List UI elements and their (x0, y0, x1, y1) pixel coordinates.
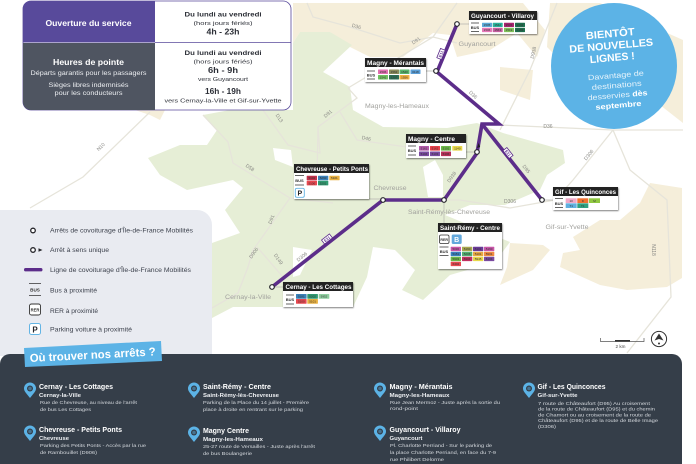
north arrow (651, 331, 667, 347)
panel: legend: Parking voiture à proximité (50, 328, 133, 334)
stop card: Guyancourt - Villaroy: BUS (471, 25, 480, 30)
stop card: Chevreuse - Petits Ponts: P (297, 190, 302, 197)
stop card: Guyancourt - Villaroy: Guyancourt - Villaroy (471, 13, 534, 20)
panel: service hours: vers Cernay-la-Ville et Gif-sur-Yvette (164, 98, 282, 104)
map background: D13 (274, 113, 284, 124)
panel: legend: RER à proximité (50, 309, 99, 315)
stop card: Magny - Centre: 5101 (443, 147, 450, 151)
stop card: Saint-Rémy - Centre: 5030 (452, 247, 459, 251)
stop card: Guyancourt - Villaroy: 1519 (506, 28, 513, 32)
stop card: Magny - Centre: 5106 (443, 152, 450, 156)
stop card: Chevreuse - Petits Ponts: BUS (295, 178, 304, 183)
map background: D91 (411, 36, 422, 46)
stop info: Magny Centre: Magny Centre (203, 428, 249, 435)
callout: new lines: destinations (591, 79, 642, 92)
stop card: Guyancourt - Villaroy: 9503 (506, 23, 513, 27)
stop card: Guyancourt - Villaroy: 0183 (517, 28, 524, 32)
stop card: Magny - Centre: 5104 (421, 152, 428, 156)
stop info: Guyancourt - Villaroy: Pl. Charlotte Perriand - Sur le parking de (390, 443, 492, 449)
scale bar: 2 km (616, 344, 626, 349)
panel: service hours: Sièges libres indemnisés (48, 82, 128, 89)
stop info: Chevreuse - Petits Ponts: Chevreuse - Petits Ponts (39, 427, 122, 434)
map background: D306 (296, 251, 309, 263)
stop info: Gif - Les Quinconces: de la route de Châteaufort (D95) et du chemin (538, 406, 655, 412)
stop card: Saint-Rémy - Centre (438, 223, 502, 269)
stop card: Cernay - Les Cottages: 5100 (298, 300, 305, 304)
stop info: Guyancourt - Villaroy (374, 426, 496, 463)
map background: D91 (323, 109, 334, 119)
panel: legend: RER (31, 308, 39, 312)
map background: D36 (351, 23, 362, 31)
stop card: Cernay - Les Cottages: 5952 (321, 295, 328, 299)
stop card: Gif - Les Quinconces: Gif - Les Quinconces (555, 189, 616, 196)
stop info: Cernay - Les Cottages: Cernay-la-Ville (39, 393, 82, 399)
stop info: Gif - Les Quinconces: (D306) (538, 424, 556, 430)
stop card: Magny - Centre (406, 134, 466, 158)
map background: D36 (543, 124, 553, 130)
stop info: Gif - Les Quinconces: de Chamort ou au croisement de la route de (538, 412, 651, 418)
stop card: Magny - Mérantais: Magny - Mérantais (367, 60, 424, 67)
stop info: Magny - Mérantais (374, 382, 500, 412)
stop info: Saint-Rémy - Centre: Saint-Rémy-lès-Chevreuse (203, 393, 280, 399)
stop card: Guyancourt - Villaroy: 1505 (484, 23, 491, 27)
stop info: Chevreuse - Petits Ponts: de Rambouillet (D906) (40, 450, 97, 456)
panel: legend (0, 210, 212, 356)
stop card: Cernay - Les Cottages: Cernay - Les Cottages (286, 284, 352, 291)
stop info: Magny - Mérantais: rond-point (390, 406, 419, 412)
stop card: Cernay - Les Cottages: BUS (286, 297, 295, 302)
stop info: Chevreuse - Petits Ponts (24, 426, 146, 456)
stop card: Saint-Rémy - Centre: B (454, 237, 459, 244)
map background: D58 (244, 163, 255, 173)
stop card: Saint-Rémy - Centre: 5901 (486, 252, 493, 256)
stop info: Gif - Les Quinconces: Gif - Les Quinconces (538, 384, 606, 391)
panel: service hours: Départs garantis pour les passagers (30, 70, 146, 77)
stop info: Gif - Les Quinconces (523, 382, 658, 430)
carpool line: E11 (437, 49, 445, 58)
stop info: Saint-Rémy - Centre: place à droite en rentrant sur le parking (203, 407, 303, 413)
stop info: Cernay - Les Cottages: Cernay - Les Cottages (39, 384, 113, 391)
stop card: Chevreuse - Petits Ponts: 5102 (308, 176, 315, 180)
map background: N118 (650, 244, 656, 256)
stop info: Chevreuse - Petits Ponts: Chevreuse (39, 436, 70, 442)
heading banner: Où trouver nos arrêts ? (30, 346, 156, 365)
map background: D149 (272, 253, 284, 266)
stop info: Guyancourt - Villaroy: Guyancourt - Villaroy (390, 427, 461, 434)
stop card: Magny - Mérantais: 1541 (380, 76, 387, 80)
stop card: Chevreuse - Petits Ponts: 5100 (308, 181, 315, 185)
stop card: Magny - Mérantais: 1540 (401, 70, 408, 74)
carpool line (272, 24, 542, 287)
callout: new lines: LIGNES ! (589, 50, 635, 66)
stop info: Cernay - Les Cottages: Rue de Chevreuse, au niveau de l'arrêt (40, 400, 138, 406)
panel: service hours: (hors jours fériés) (194, 21, 253, 27)
place names: Saint-Rémy-lès-Chevreuse (408, 209, 490, 216)
place names: Magny-les-Hameaux (365, 103, 430, 110)
map background: D306 (583, 149, 596, 162)
stop info: Guyancourt - Villaroy: Guyancourt (390, 436, 423, 442)
stop card: Magny - Mérantais: 1506 (380, 70, 387, 74)
stop card: Magny - Mérantais: 1562 (391, 70, 398, 74)
stop card: Saint-Rémy - Centre: 5904 (464, 257, 471, 261)
stop markers (270, 22, 544, 289)
panel: legend: BUS (30, 288, 40, 292)
carpool line: E11 (504, 149, 513, 158)
panel: service hours: vers Guyancourt (198, 77, 249, 83)
stop card: Gif - Les Quinconces: 10 (570, 199, 573, 203)
stop info: Gif - Les Quinconces: Châteaufort (D95) et de la route de Belle Image (538, 418, 658, 424)
stop info: Gif - Les Quinconces: 7 route de Châteaufort (D95) Au croisement (538, 401, 651, 407)
place names (225, 41, 589, 301)
stop card: Guyancourt - Villaroy (469, 11, 537, 34)
stop card: Gif - Les Quinconces: M (593, 199, 596, 203)
stop card: Chevreuse - Petits Ponts: 5290 (320, 176, 327, 180)
stop info: Guyancourt - Villaroy: la place Charlotte Perriand, en face du 7-9 (390, 450, 496, 456)
place names: Cernay-la-Ville (225, 294, 271, 301)
stop card: Chevreuse - Petits Ponts: 5101 (331, 176, 338, 180)
map background: D938 (530, 46, 538, 59)
map background (30, 3, 683, 353)
stop card: Cernay - Les Cottages: 5202 (309, 295, 316, 299)
map background: D36 (467, 90, 478, 101)
panel: legend: Arrêt à sens unique (50, 248, 110, 254)
stop card: Saint-Rémy - Centre: 6104 (486, 257, 493, 261)
stop card: Magny - Centre: 5161 (421, 147, 428, 151)
stop card: Gif - Les Quinconces: D (582, 199, 585, 203)
place names: Chevreuse (374, 185, 407, 192)
callout: new lines: Davantage de (588, 68, 644, 82)
map background: N10 (96, 142, 107, 153)
stop card: Saint-Rémy - Centre: 5945 (475, 257, 482, 261)
panel: service hours: Ouverture du service (46, 18, 132, 28)
scale bar (600, 338, 644, 349)
stop connectors (272, 24, 553, 287)
stop info: Saint-Rémy - Centre: Parking de la Place du 14 juillet - Première (203, 400, 309, 406)
stop card: Chevreuse - Petits Ponts (294, 164, 369, 199)
stop card: Magny - Centre: 5103 (432, 152, 439, 156)
stop card: Saint-Rémy - Centre: 5101 (475, 252, 482, 256)
stop card: Magny - Centre: 1140 (454, 147, 461, 151)
stop card: Saint-Rémy - Centre: 5181 (452, 252, 459, 256)
map background: D46 (361, 135, 372, 143)
callout: new lines: desservies dès (587, 88, 648, 102)
stop info: Magny Centre (188, 426, 316, 457)
stop card: Saint-Rémy - Centre: RER (440, 238, 448, 242)
panel: service hours: (hors jours fériés) (194, 60, 253, 66)
stop card: Saint-Rémy - Centre: 5206 (464, 252, 471, 256)
map background: D906 (248, 247, 260, 260)
map background: D938 (446, 171, 458, 184)
stop info: Magny - Mérantais: Magny - Mérantais (390, 384, 453, 391)
stop info: Magny - Mérantais: Magny-les-Hameaux (390, 393, 450, 399)
panel: where to find our stops (0, 341, 682, 464)
stop card: Magny - Mérantais: 1207 (391, 76, 398, 80)
stop card: Magny - Mérantais: BUS (367, 72, 376, 78)
stop card: Magny - Centre: Magny - Centre (408, 136, 455, 143)
stop info: Cernay - Les Cottages: de bus Les Cottages (40, 407, 92, 413)
stop card: Cernay - Les Cottages (283, 282, 353, 307)
stop info: Cernay - Les Cottages (24, 382, 138, 413)
panel: service hours: Du lundi au vendredi (184, 50, 262, 57)
stop card: Magny - Mérantais (365, 58, 426, 82)
map background: D91 (268, 214, 277, 225)
stop card: Gif - Les Quinconces: BUS (555, 201, 564, 206)
stop card: Cernay - Les Cottages: 5181 (298, 295, 305, 299)
panel: service hours: Du lundi au vendredi (184, 12, 262, 18)
stop card: Chevreuse - Petits Ponts: Chevreuse - Petits Ponts (296, 166, 368, 173)
stop card: Guyancourt - Villaroy: 1506 (484, 28, 491, 32)
panel: legend: Bus à proximité (50, 288, 98, 294)
stop card: Saint-Rémy - Centre: 5160 (464, 247, 471, 251)
stop info: Magny Centre: 25-27 route de Versailles - Juste après l'arrêt (203, 444, 316, 450)
stop card: Gif - Les Quinconces: T1 (569, 204, 573, 208)
stop card: Cernay - Les Cottages: 5101 (309, 300, 316, 304)
panel: legend: Ligne de covoiturage d'Île-de-France Mobilités (50, 267, 191, 274)
stop card: Magny - Centre: 5162 (432, 147, 439, 151)
stop info: Saint-Rémy - Centre (188, 382, 309, 413)
callout: new lines: BIENTÔT (585, 25, 636, 42)
map background: D95 (521, 164, 531, 175)
stop card: Gif - Les Quinconces: T1 (581, 204, 585, 208)
stop info: Magny Centre: de bus Boulangerie (203, 451, 252, 457)
callout: new lines: septembre (595, 99, 642, 112)
place names: Gif-sur-Yvette (546, 224, 589, 231)
stop card: Magny - Mérantais: 0118 (412, 70, 419, 74)
stop card: Guyancourt - Villaroy: 1511 (517, 23, 524, 27)
stop card: Saint-Rémy - Centre: 5160 (486, 247, 493, 251)
panel: service hours: Heures de pointe (53, 57, 124, 67)
stop card: Saint-Rémy - Centre: Saint-Rémy - Centre (440, 225, 500, 232)
stop card: Guyancourt - Villaroy: 1542 (494, 23, 501, 27)
stop card: Gif - Les Quinconces (553, 187, 618, 210)
stop info: Magny - Mérantais: Rue Jean Mermoz - Juste après la sortie du (390, 400, 500, 406)
panel: service hours: pour les conducteurs (54, 90, 122, 97)
stop card: Saint-Rémy - Centre: 5903 (452, 257, 459, 261)
stop card: Guyancourt - Villaroy: 1563 (494, 28, 501, 32)
stop card: Saint-Rémy - Centre: 5101 (475, 247, 482, 251)
callout: new lines (551, 3, 677, 129)
panel: legend: P (32, 325, 38, 334)
stop card: Magny - Centre: BUS (408, 148, 417, 153)
panel: service hours (23, 1, 291, 110)
panel: service hours: 4h - 23h (206, 28, 240, 36)
panel: service hours: 16h - 19h (205, 87, 241, 96)
stop info: Gif - Les Quinconces: Gif-sur-Yvette (538, 393, 578, 399)
panel: service hours: 6h - 9h (208, 66, 238, 75)
stop info: Magny Centre: Magny-les-Hameaux (203, 437, 264, 443)
callout: new lines: DE NOUVELLES (569, 37, 654, 56)
stop info: Saint-Rémy - Centre: Saint-Rémy - Centre (203, 384, 271, 391)
stop card: Saint-Rémy - Centre: 6402 (452, 262, 459, 266)
stop info: Chevreuse - Petits Ponts: Parking des Petits Ponts - Accès par la rue (40, 443, 146, 449)
panel: legend: Arrêts de covoiturage d'Île-de-France Mobilités (50, 228, 193, 234)
stop info: Guyancourt - Villaroy: rue Philibert Delorme (390, 457, 444, 463)
heading banner (24, 341, 162, 367)
place names: Guyancourt (458, 41, 496, 48)
carpool line: E11 (323, 234, 332, 243)
stop card: Saint-Rémy - Centre: BUS (440, 249, 449, 254)
stop card: Chevreuse - Petits Ponts: 5201 (320, 181, 327, 185)
map background: D306 (504, 199, 516, 205)
stop card: Magny - Mérantais: 1556 (401, 76, 408, 80)
